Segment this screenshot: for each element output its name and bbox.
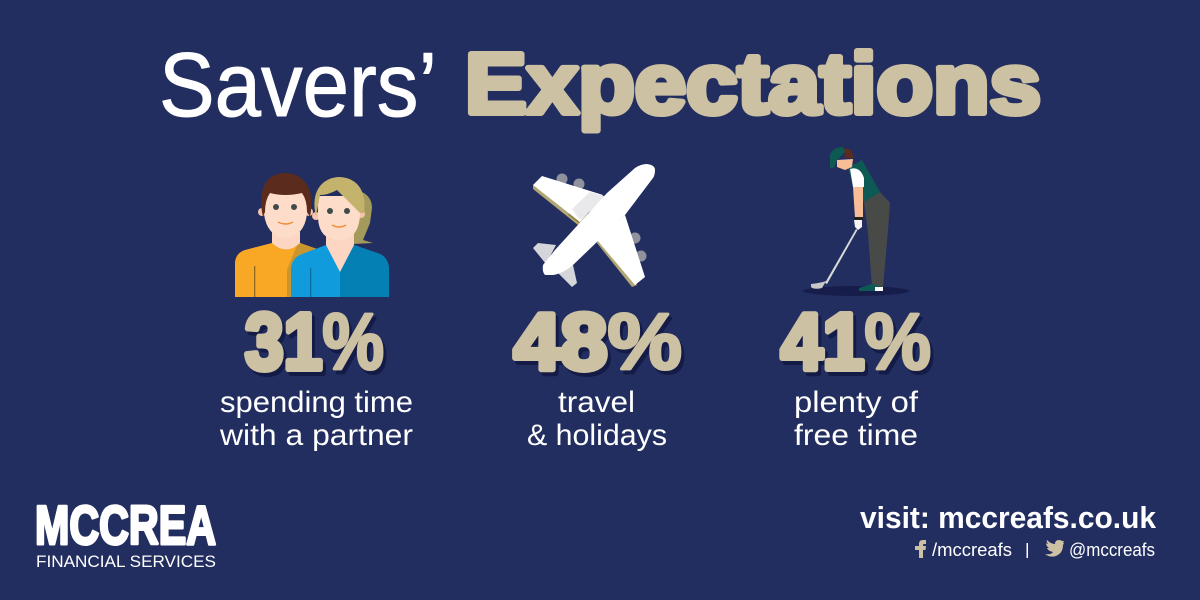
icon: facebook [915, 540, 926, 558]
website address: visit: mccreafs.co.uk [860, 500, 1157, 535]
website and social links [860, 500, 1157, 560]
man [235, 173, 320, 297]
caption: spending time with a partner: spending time [220, 386, 413, 419]
stat: 31%: 31% [245, 297, 384, 386]
facebook handle: /mccreafs [932, 540, 1012, 560]
twitter handle: @mccreafs [1069, 540, 1155, 560]
icon: golfer [803, 147, 909, 296]
stat: 48%: 48% [514, 297, 682, 386]
separator [1026, 543, 1028, 558]
woman [291, 177, 389, 297]
icon: couple [235, 173, 389, 297]
panel: plenty of free time [781, 147, 934, 452]
caption: plenty of free time: free time [794, 419, 918, 452]
caption: plenty of free time [794, 386, 919, 452]
panel: spending time with a partner [219, 173, 413, 452]
title word: Savers: Savers’ [159, 35, 437, 136]
panel: travel and holidays [514, 164, 685, 452]
caption: spending time with a partner [219, 386, 413, 452]
caption: spending time with a partner: with a partner [219, 419, 413, 452]
title [159, 35, 1041, 136]
logo: McCrea Financial Services: FINANCIAL SERVICES [36, 552, 216, 571]
caption: plenty of free time: plenty of [794, 386, 919, 419]
stat: 41%: 41% [784, 301, 934, 390]
caption: travel and holidays: travel [558, 386, 635, 419]
stat: 48%: 48% [517, 301, 685, 390]
caption: travel and holidays [527, 386, 667, 452]
logo: McCrea Financial Services: MCCREA [35, 494, 216, 556]
icon: twitter bird [1045, 540, 1064, 557]
logo: McCrea Financial Services [35, 494, 216, 571]
stat: 41%: 41% [781, 297, 931, 386]
stat: 31%: 31% [248, 301, 387, 390]
caption: travel and holidays: & holidays [527, 419, 667, 452]
title word: Expectations: Expectations [465, 37, 1041, 132]
icon: airplane [533, 164, 655, 287]
